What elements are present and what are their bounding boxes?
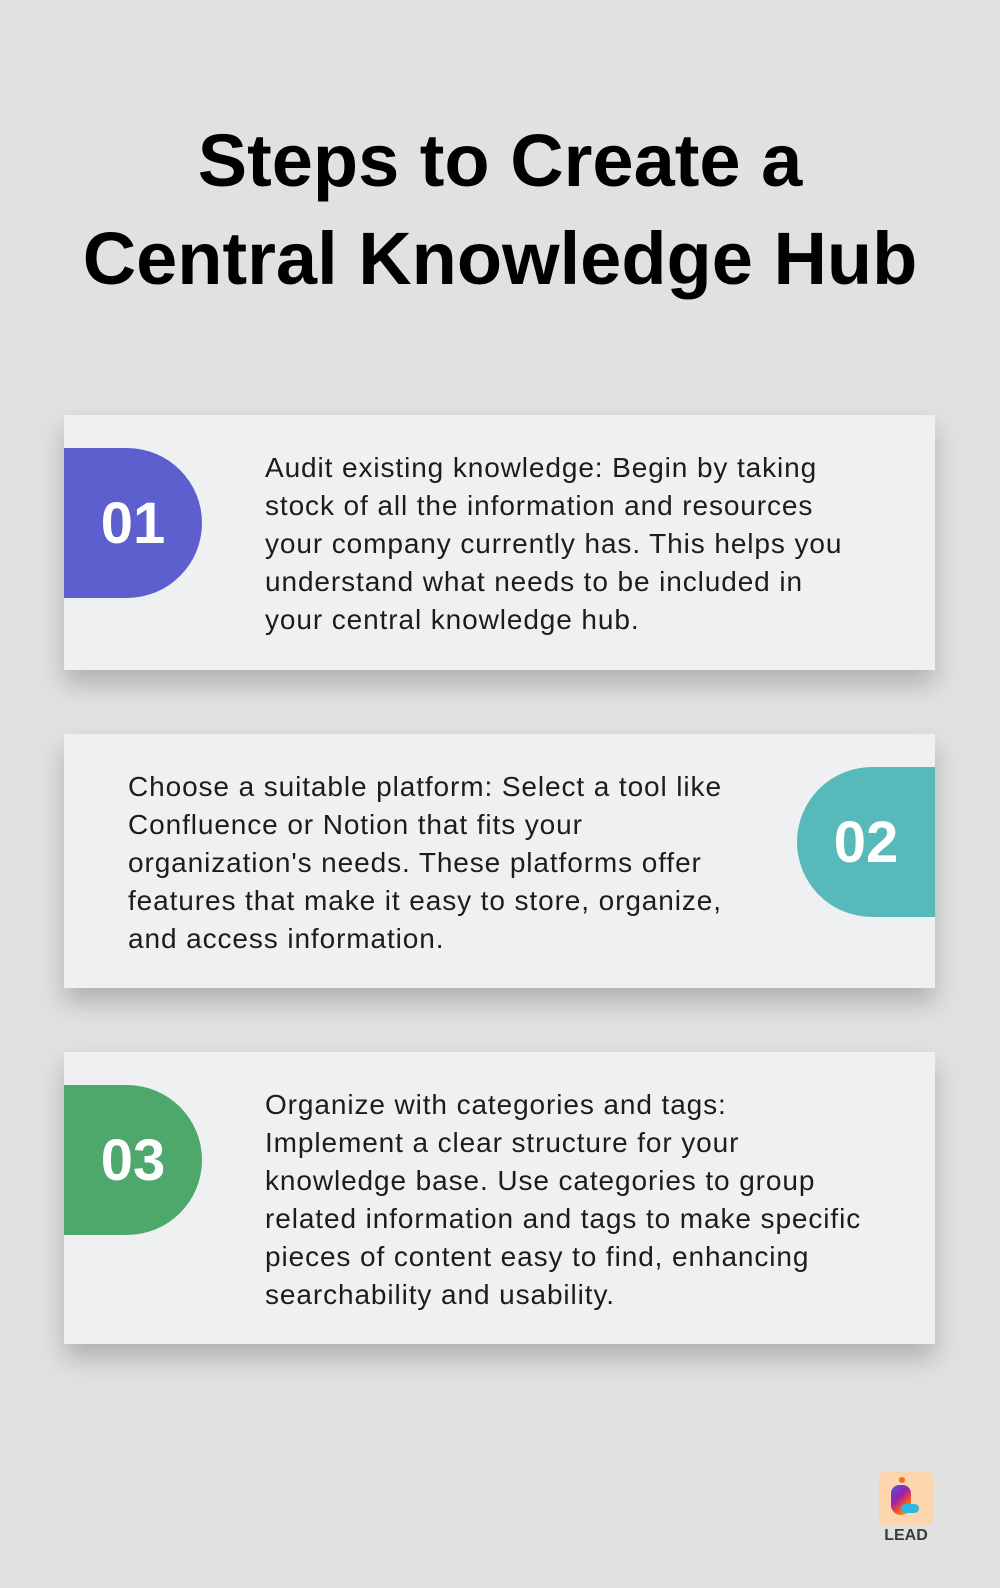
text step 2: [128, 771, 722, 954]
text step 1: Audit existing knowledge: Begin by taking: [265, 452, 817, 483]
text step 2: features that make it easy to store, organize,: [128, 885, 722, 916]
badge 02: 02: [834, 810, 898, 874]
panel: step 1: [64, 415, 935, 670]
panel: step 3: [64, 1052, 935, 1344]
text step 3: related information and tags to make specific: [265, 1203, 861, 1234]
text step 3: [265, 1089, 861, 1310]
text step 2: and access information.: [128, 923, 444, 954]
badge 03: 03: [101, 1128, 165, 1192]
title: [83, 119, 917, 300]
badge 02: [797, 767, 935, 917]
logo text: LEAD: [884, 1527, 928, 1544]
text step 2: Confluence or Notion that fits your: [128, 809, 583, 840]
text step 3: pieces of content easy to find, enhancing: [265, 1241, 809, 1272]
title: Steps to Create a: [198, 119, 802, 202]
text step 2: Choose a suitable platform: Select a tool like: [128, 771, 722, 802]
text step 3: searchability and usability.: [265, 1279, 615, 1310]
badge 03: [64, 1085, 202, 1235]
title: Central Knowledge Hub: [83, 217, 917, 300]
text step 1: [265, 452, 842, 635]
text step 3: knowledge base. Use categories to group: [265, 1165, 815, 1196]
logo icon: [879, 1472, 933, 1525]
text step 1: your central knowledge hub.: [265, 604, 640, 635]
panel: step 2: [64, 734, 935, 988]
text step 3: Organize with categories and tags:: [265, 1089, 727, 1120]
text step 2: organization's needs. These platforms offer: [128, 847, 702, 878]
badge 01: 01: [101, 490, 165, 556]
text step 3: Implement a clear structure for your: [265, 1127, 739, 1158]
badge 01: [64, 448, 202, 598]
text step 1: understand what needs to be included in: [265, 566, 803, 597]
text step 1: stock of all the information and resources: [265, 490, 813, 521]
logo: [879, 1472, 933, 1544]
text step 1: your company currently has. This helps you: [265, 528, 842, 559]
